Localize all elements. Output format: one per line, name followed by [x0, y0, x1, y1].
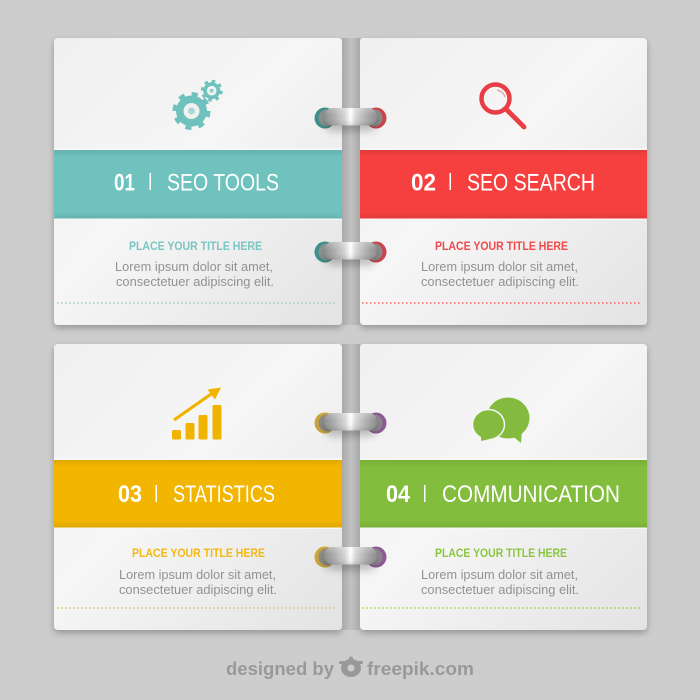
heading: 04 communication: COMMUNICATION	[442, 481, 620, 508]
footer credit	[226, 656, 474, 679]
body text: consectetuer adipiscing elit.	[116, 275, 274, 289]
heading: 04 communication	[386, 481, 620, 508]
body text: consectetuer adipiscing elit.	[421, 583, 579, 597]
body text: Lorem ipsum dolor sit amet,	[421, 260, 578, 274]
body text: Lorem ipsum dolor sit amet,	[421, 568, 578, 582]
body text	[421, 568, 579, 597]
subtitle: PLACE YOUR TITLE HERE	[129, 239, 262, 253]
subtitle: PLACE YOUR TITLE HERE	[132, 546, 265, 560]
heading: 01 SEO tools	[114, 170, 279, 196]
body text: Lorem ipsum dolor sit amet,	[115, 260, 273, 274]
body text: Lorem ipsum dolor sit amet,	[119, 568, 276, 582]
heading: 03 statistics	[118, 481, 275, 508]
panel: 02 SEO search	[360, 38, 647, 325]
subtitle: PLACE YOUR TITLE HERE	[435, 546, 567, 560]
icon: gears	[174, 81, 221, 128]
ring: bottom row upper	[314, 412, 386, 434]
body text: consectetuer adipiscing elit.	[119, 583, 277, 597]
band: teal	[54, 148, 342, 220]
body text	[421, 260, 579, 289]
band: red	[360, 148, 647, 220]
footer credit: freepik.com	[367, 658, 474, 679]
heading: 02 SEO search	[411, 170, 595, 196]
icon: bar chart with arrow	[172, 388, 222, 440]
icon: magnifier	[482, 84, 524, 127]
body text	[115, 260, 274, 289]
subtitle: PLACE YOUR TITLE HERE	[435, 239, 568, 253]
heading: 04 communication: 04	[386, 481, 411, 508]
heading: 02 SEO search: 02	[411, 170, 436, 196]
band: green	[360, 458, 647, 529]
panel: 01 SEO tools	[54, 38, 342, 325]
body text: consectetuer adipiscing elit.	[421, 275, 579, 289]
footer credit: designed by	[226, 658, 335, 679]
heading: 01 SEO tools: SEO TOOLS	[167, 170, 279, 196]
heading: 03 statistics: 03	[118, 481, 142, 508]
ring: top row upper	[314, 108, 386, 128]
icon: freepik mascot	[339, 656, 363, 677]
ring: bottom row lower	[314, 546, 386, 568]
body text	[119, 568, 277, 597]
heading: 02 SEO search: SEO SEARCH	[467, 170, 595, 196]
ring: top row lower	[314, 242, 386, 262]
panel: 04 communication	[360, 344, 647, 630]
heading: 01 SEO tools: 01	[114, 170, 135, 196]
band: amber	[54, 458, 342, 529]
icon: speech bubbles	[472, 398, 530, 443]
heading: 03 statistics: STATISTICS	[173, 481, 275, 508]
panel: 03 statistics	[54, 344, 342, 630]
